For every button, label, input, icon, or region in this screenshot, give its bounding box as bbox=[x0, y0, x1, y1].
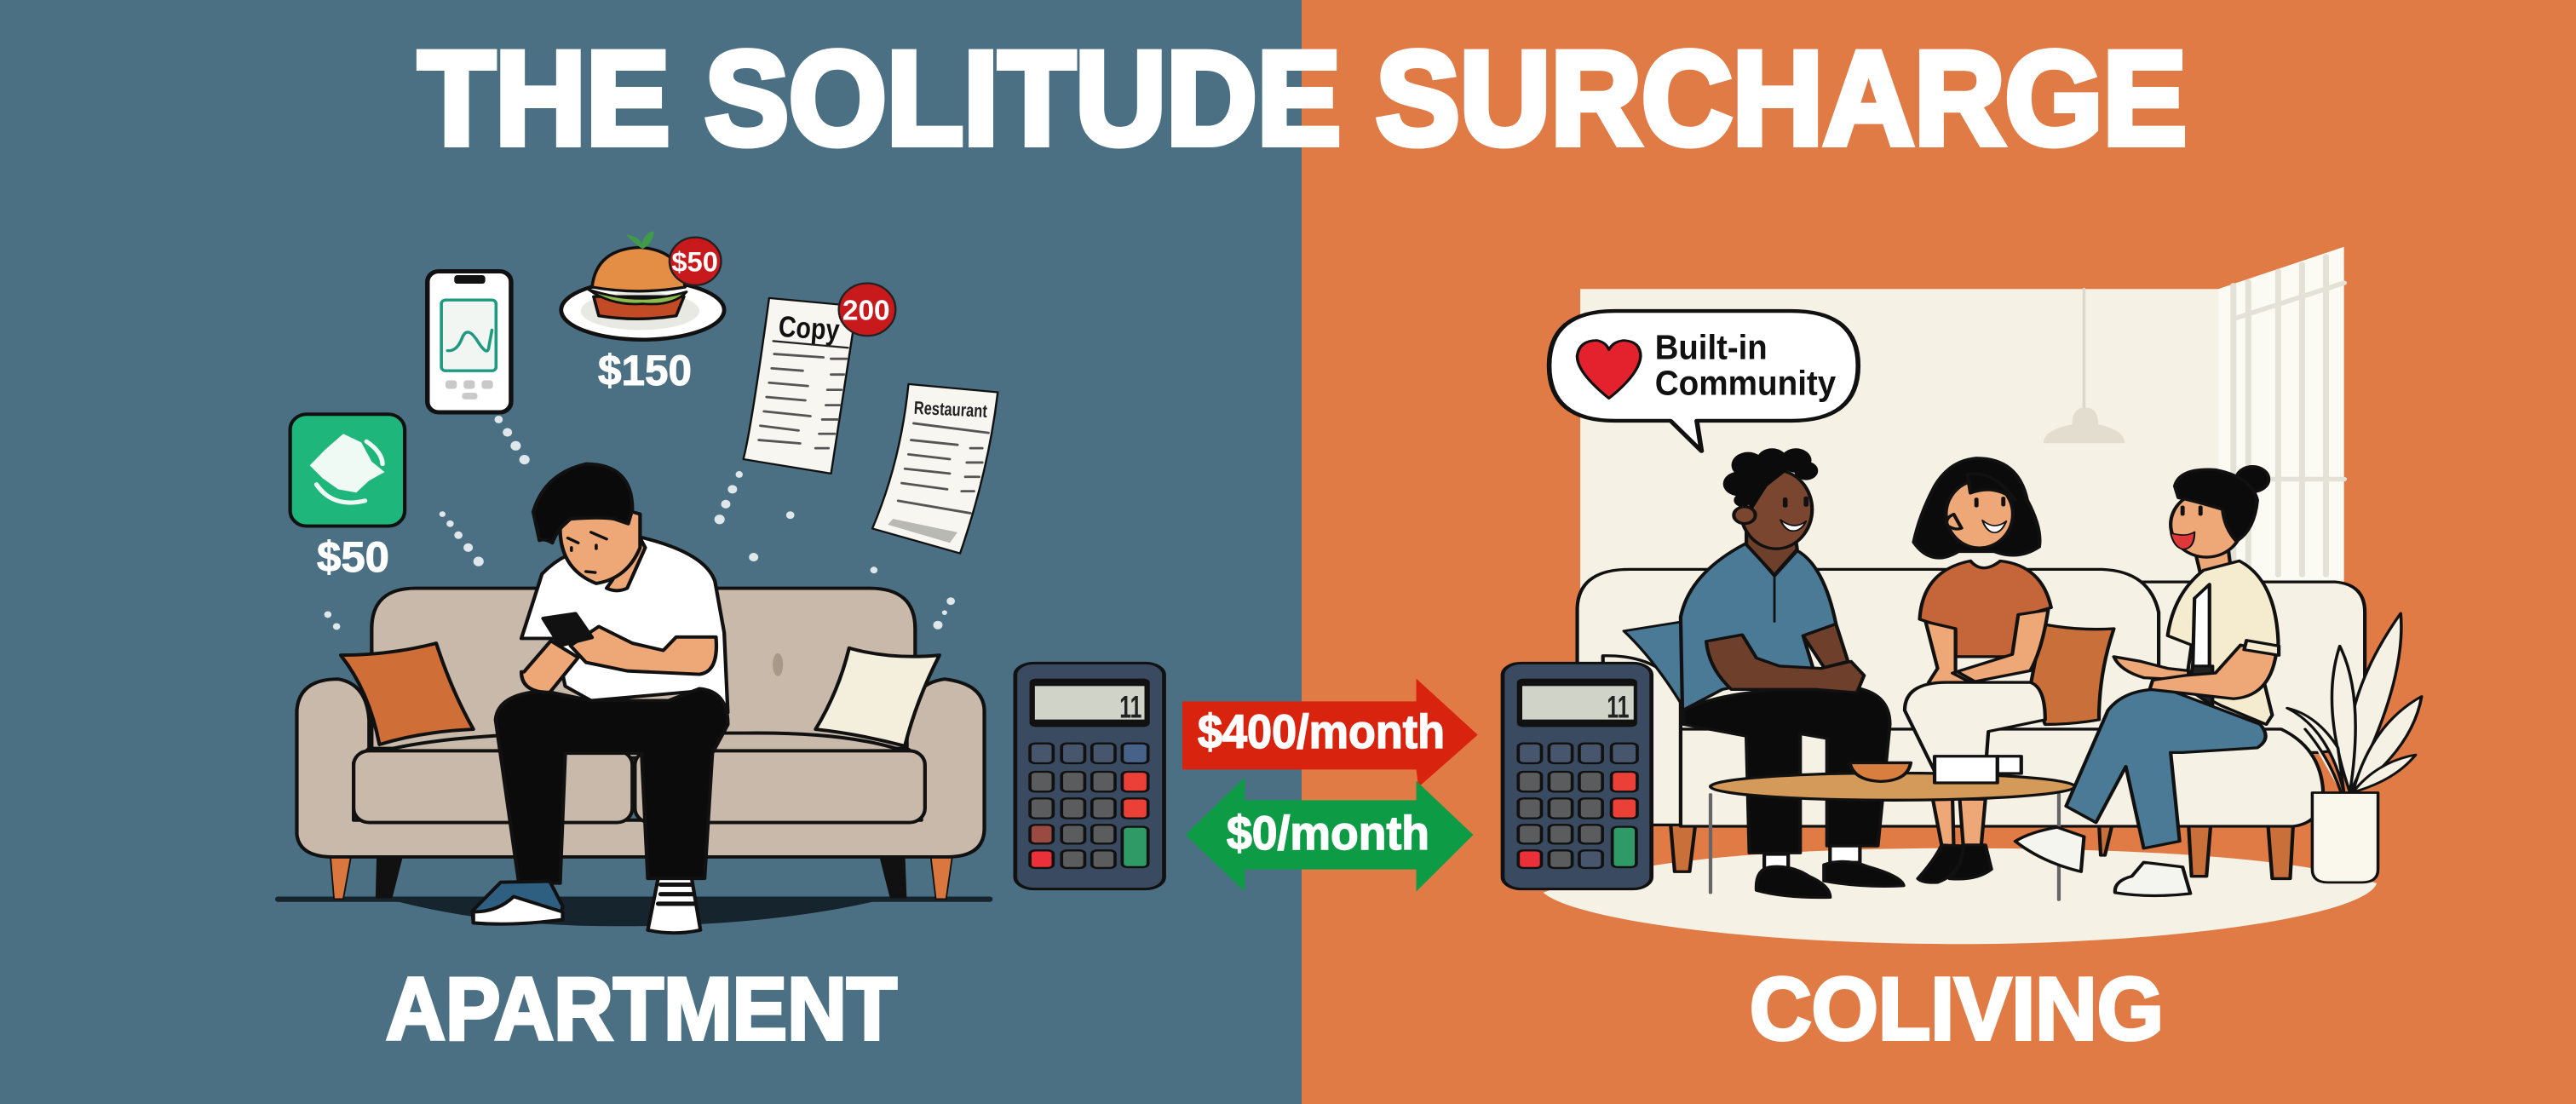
arms bbox=[1706, 635, 1864, 693]
icon: receipt copy bbox=[744, 298, 857, 474]
panel: coliving scene bbox=[1544, 247, 2422, 944]
person: man in blue shirt bbox=[1681, 448, 1904, 898]
head bbox=[1740, 470, 1812, 549]
arrow: $400/month red bbox=[1182, 679, 1478, 787]
icon: restaurant receipt: Restaurant bbox=[913, 398, 988, 422]
sofa bbox=[296, 589, 985, 899]
plant bbox=[2287, 613, 2422, 883]
rug bbox=[1544, 848, 2377, 944]
text: Community: Community bbox=[1655, 364, 1836, 402]
jeans bbox=[2066, 689, 2266, 848]
calculators and arrows bbox=[1015, 663, 1652, 892]
orange pillow bbox=[341, 643, 474, 745]
badge: 200 on receipt: 200 bbox=[842, 295, 890, 326]
trousers bbox=[496, 688, 727, 883]
phone in hands bbox=[543, 613, 592, 646]
hair and bun bbox=[2236, 467, 2268, 492]
right calculator: 11 bbox=[1607, 690, 1630, 725]
panel: apartment scene bbox=[275, 231, 998, 933]
neck bbox=[607, 538, 645, 590]
eyes and mouth bbox=[568, 532, 607, 572]
neck bbox=[2194, 543, 2230, 587]
man on sofa bbox=[472, 464, 727, 933]
right sneaker bbox=[647, 878, 700, 933]
face bbox=[560, 500, 640, 584]
cups bbox=[1998, 756, 2021, 773]
label: coliving: COLIVING bbox=[1750, 960, 2164, 1059]
arms bbox=[2114, 657, 2188, 680]
left calculator bbox=[1015, 663, 1164, 889]
left sneaker bbox=[472, 882, 563, 924]
icon: burger on plate bbox=[561, 231, 724, 340]
shirt bbox=[521, 537, 727, 712]
pendant lamp bbox=[2044, 289, 2125, 443]
bowl bbox=[1849, 762, 1911, 781]
sofa bbox=[1578, 569, 2365, 878]
label: $150: $150 bbox=[598, 347, 692, 394]
speech bubble: built-in community bbox=[1550, 311, 1858, 451]
label: $50: $50 bbox=[317, 533, 389, 581]
left calculator: 11 bbox=[1119, 690, 1141, 725]
icon: restaurant receipt bbox=[872, 384, 998, 554]
shirt bbox=[1681, 543, 1836, 710]
coffee table bbox=[1711, 756, 2075, 900]
cream pillow bbox=[815, 648, 940, 746]
neck bbox=[1746, 528, 1797, 575]
icon: heart bbox=[1578, 341, 1641, 399]
arrow: $0/month green bbox=[1186, 778, 1473, 892]
blue pillow bbox=[1624, 622, 1682, 706]
orange pillow bbox=[2030, 624, 2114, 724]
icon: phone with chart bbox=[428, 271, 511, 412]
trousers bbox=[1683, 687, 1889, 853]
icon: green app bbox=[290, 414, 405, 526]
right calculator bbox=[1503, 663, 1652, 889]
badge: 200 on receipt bbox=[839, 283, 895, 336]
dotted connectors bbox=[325, 416, 955, 630]
text: $0/month: $0/month bbox=[1227, 806, 1429, 860]
text: $400/month: $400/month bbox=[1198, 704, 1445, 758]
vest shirt bbox=[2168, 561, 2278, 724]
background: left blue half bbox=[0, 0, 1302, 1104]
background: right orange half bbox=[1302, 0, 2576, 1104]
curly hair bbox=[1723, 448, 1818, 509]
arms bbox=[571, 626, 716, 675]
label: apartment: APARTMENT bbox=[386, 960, 897, 1059]
title: THE SOLITUDE SURCHARGE bbox=[418, 25, 2187, 173]
text: Built-in: Built-in bbox=[1655, 328, 1768, 366]
person: woman in orange shirt bbox=[1905, 458, 2051, 883]
badge: $50 on burger: $50 bbox=[671, 247, 718, 278]
hair bbox=[533, 464, 632, 543]
person: woman with bun bbox=[2015, 467, 2279, 895]
room wall and window bbox=[1580, 247, 2344, 706]
badge: $50 on burger bbox=[670, 238, 722, 285]
icon: receipt copy: Copy bbox=[778, 309, 841, 347]
face bbox=[2171, 492, 2242, 557]
pot bbox=[2312, 793, 2378, 883]
floor shadow bbox=[275, 897, 992, 926]
